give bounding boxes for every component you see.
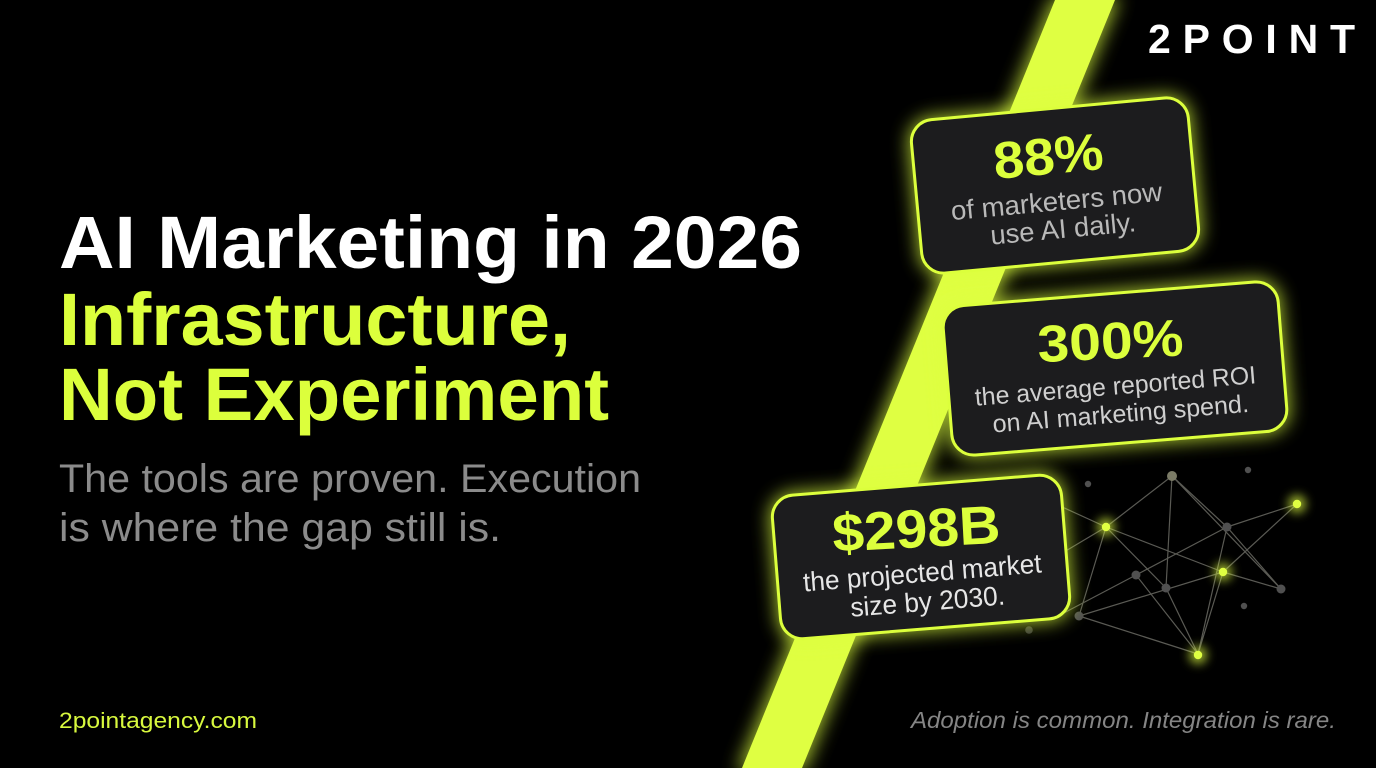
diagonal neon band bbox=[742, 0, 1115, 768]
brand logo: 2POINT bbox=[1148, 16, 1355, 62]
grey nodes bbox=[1025, 467, 1286, 634]
title line 3: Not Experiment bbox=[59, 353, 609, 436]
stat description line 1: of marketers now bbox=[950, 177, 1164, 226]
title line 2: Infrastructure, bbox=[59, 278, 571, 361]
stat value: 88% bbox=[991, 123, 1106, 191]
panel: $298B stat card bbox=[771, 474, 1071, 640]
stat description line 1: the projected market bbox=[802, 548, 1043, 597]
network lines bbox=[1060, 476, 1297, 654]
stat value: 300% bbox=[1036, 310, 1185, 374]
subtitle line 1: The tools are proven. Execution bbox=[59, 457, 641, 501]
panel: 88% stat card bbox=[909, 96, 1201, 275]
stat description line 2: size by 2030. bbox=[849, 580, 1006, 623]
title bbox=[59, 201, 802, 436]
subtitle bbox=[59, 457, 641, 550]
title line 1: AI Marketing in 2026 bbox=[59, 201, 802, 284]
stat description line 2: on AI marketing spend. bbox=[991, 390, 1250, 438]
subtitle line 2: is where the gap still is. bbox=[59, 506, 501, 550]
network graphic bbox=[1025, 467, 1306, 664]
panel: 300% stat card bbox=[942, 280, 1288, 457]
tagline: Adoption is common. Integration is rare. bbox=[909, 707, 1336, 733]
stat description line 2: use AI daily. bbox=[989, 207, 1137, 251]
glowing nodes bbox=[1097, 495, 1306, 664]
website url: 2pointagency.com bbox=[59, 708, 257, 733]
stat description line 1: the average reported ROI bbox=[974, 361, 1257, 412]
stat value: $298B bbox=[831, 495, 1002, 564]
